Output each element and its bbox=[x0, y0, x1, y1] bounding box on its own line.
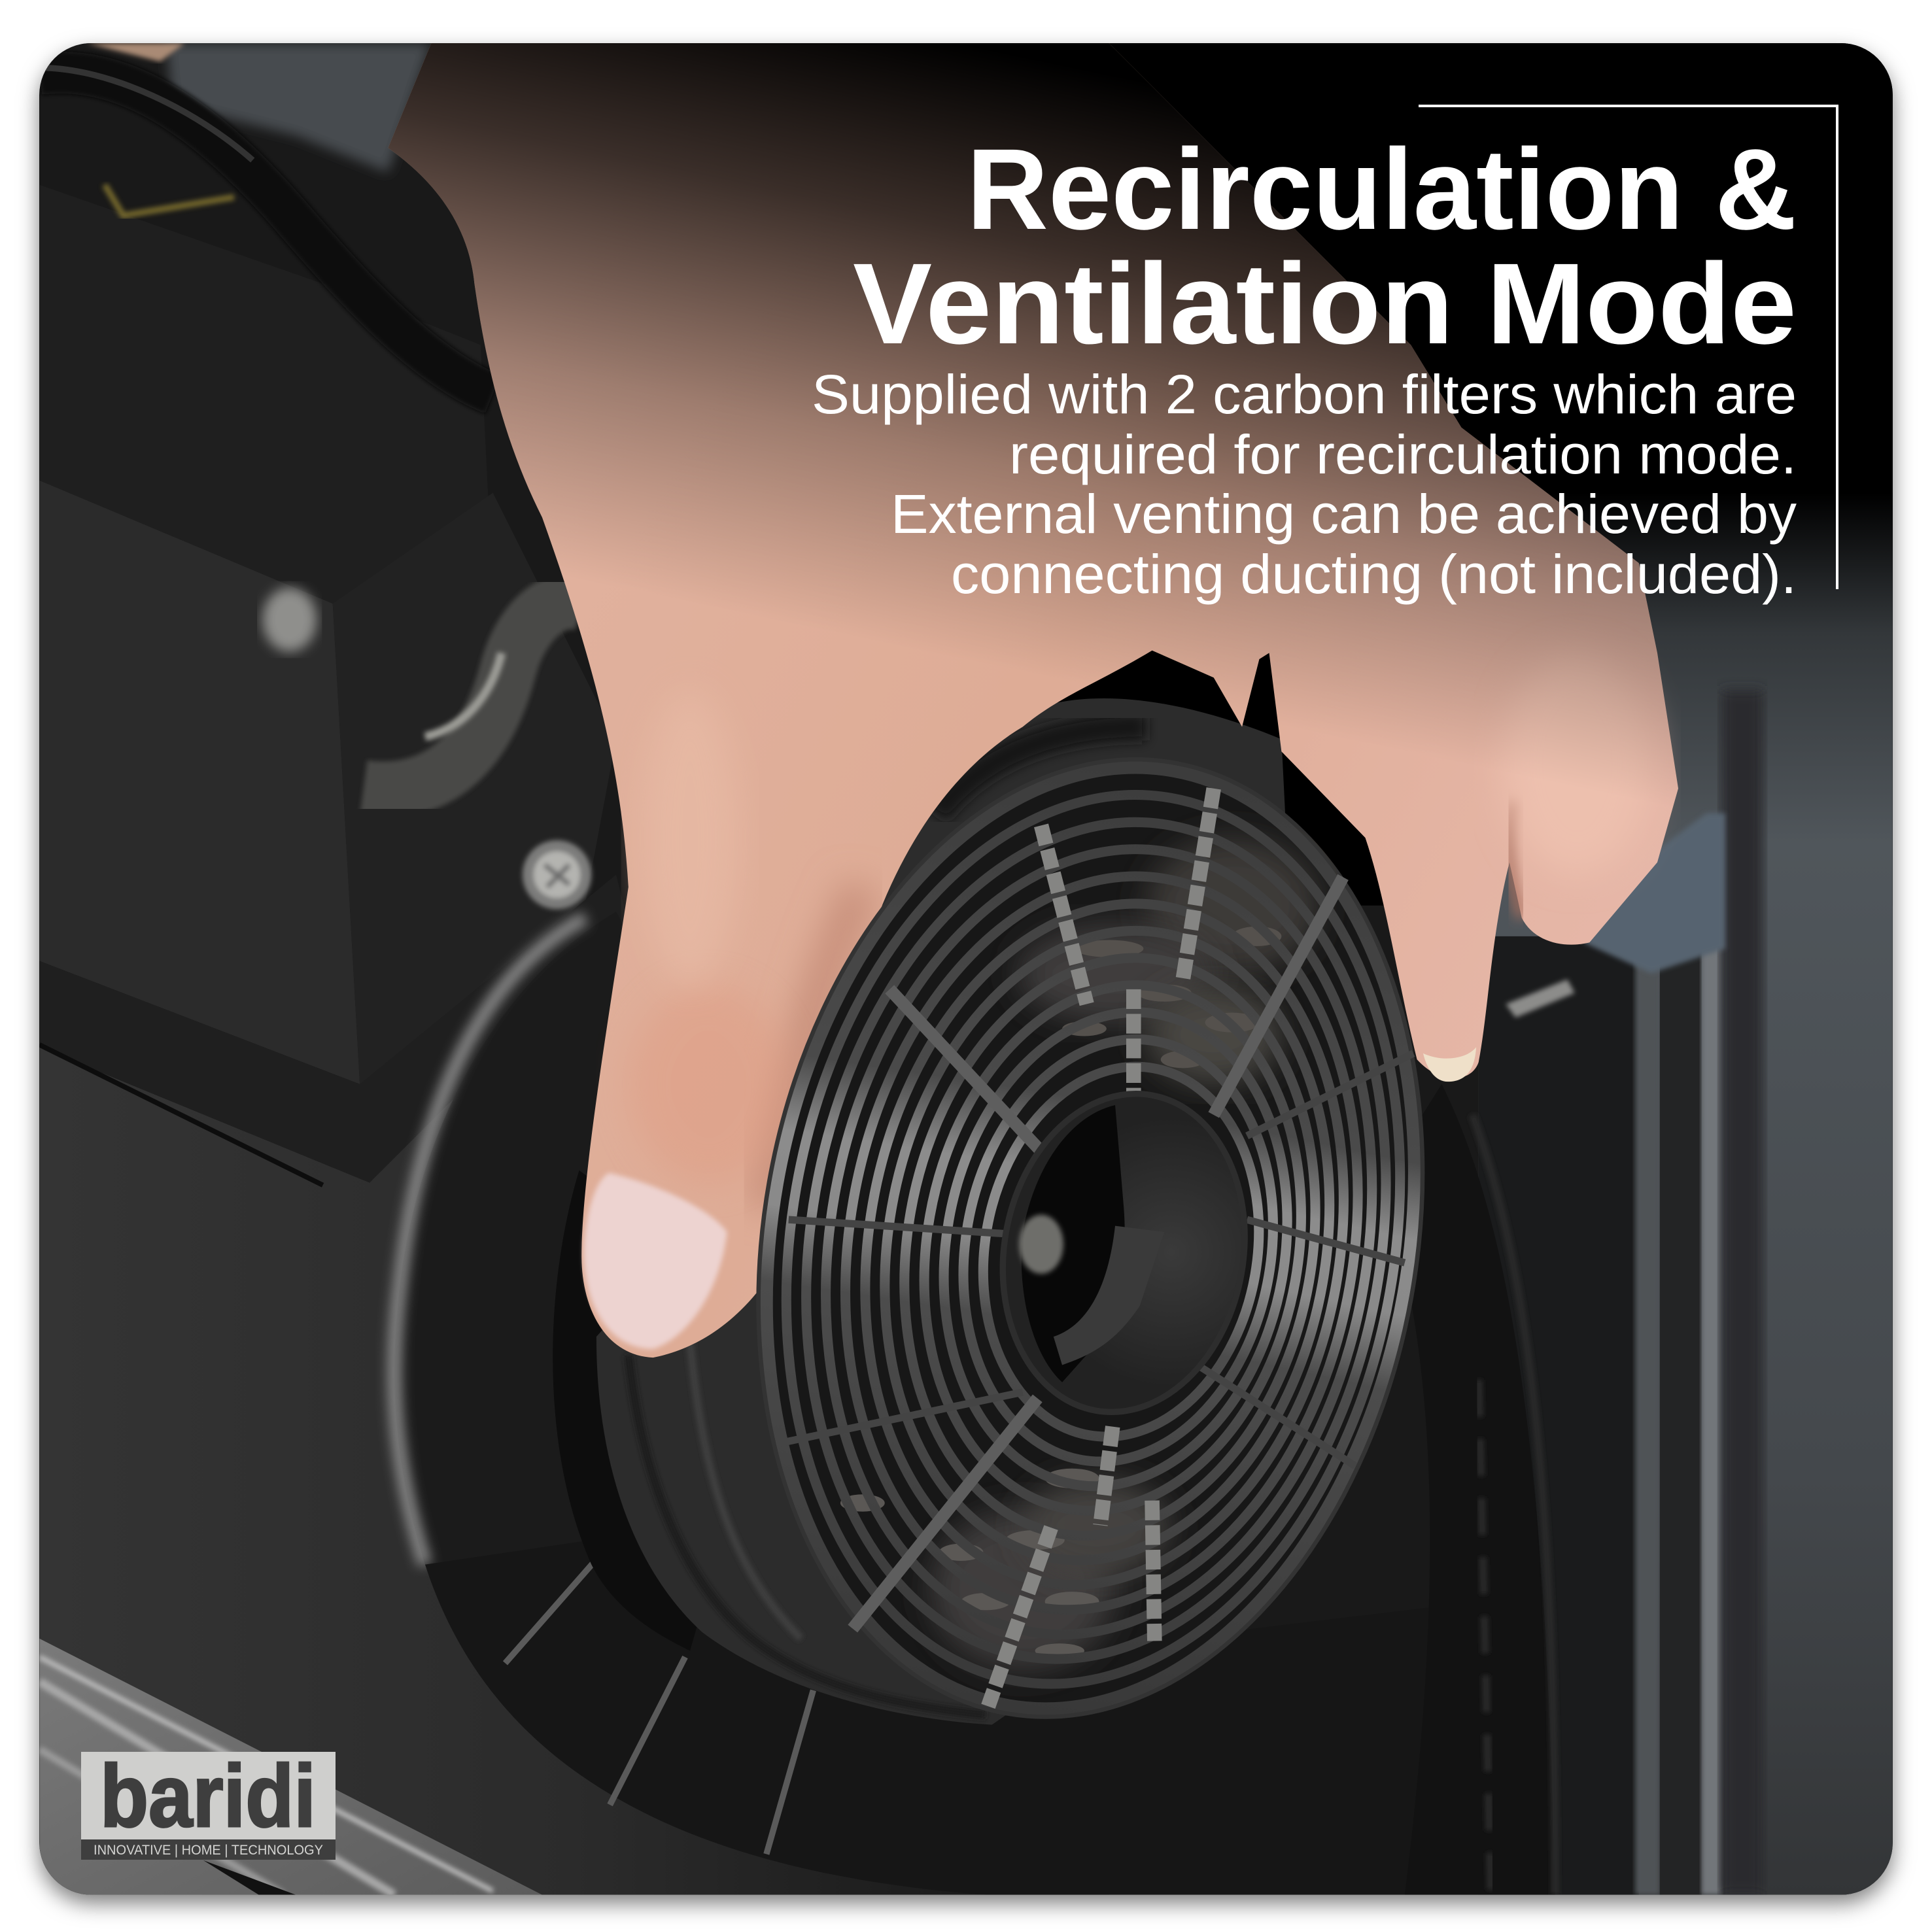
upper left dark block bbox=[39, 185, 493, 604]
round blower shell highlight bbox=[394, 918, 585, 1565]
description text bbox=[812, 364, 1797, 605]
dark top right background bbox=[986, 43, 1893, 906]
description text: External venting can be achieved by bbox=[891, 483, 1797, 545]
title bbox=[853, 126, 1797, 368]
hand bbox=[388, 43, 1678, 1358]
carbon pebbles top bbox=[1016, 838, 1319, 1084]
logo: baridi bbox=[81, 1747, 336, 1860]
dark area inside shell bbox=[394, 912, 863, 1725]
dark blower outlet bbox=[425, 1540, 1479, 1895]
black hose bbox=[1380, 1084, 1555, 1895]
right side steel cabinet bbox=[1479, 493, 1893, 1895]
description text: connecting ducting (not included). bbox=[951, 543, 1797, 605]
thumbnail bbox=[584, 1173, 727, 1349]
filter side body bbox=[596, 698, 1294, 1725]
carbon filter disc bbox=[688, 709, 1493, 1768]
black inlet crescent bbox=[553, 1171, 739, 1651]
concentric grille rings bbox=[695, 716, 1486, 1760]
central hub bbox=[978, 1074, 1269, 1431]
grille spokes bbox=[776, 789, 1413, 1706]
title: Recirculation & bbox=[967, 126, 1797, 254]
filter face base bbox=[688, 709, 1493, 1768]
title: Ventilation Mode bbox=[853, 240, 1797, 368]
carbon pebbles bottom bbox=[840, 1469, 1171, 1669]
chrome screw bbox=[523, 840, 591, 909]
description text: Supplied with 2 carbon filters which are bbox=[812, 364, 1797, 425]
lower left housing bbox=[39, 912, 1109, 1895]
fingernail bbox=[1423, 1047, 1476, 1082]
curved silver pipe bbox=[364, 601, 585, 790]
logo wordmark: baridi bbox=[100, 1747, 316, 1845]
grey tube and wires bbox=[39, 43, 493, 394]
description text: required for recirculation mode. bbox=[1009, 424, 1797, 485]
top black vignette over hand bbox=[39, 43, 1893, 906]
blower fins bbox=[505, 1386, 813, 1854]
logo tagline: INNOVATIVE | HOME | TECHNOLOGY bbox=[94, 1843, 323, 1858]
block bolt bbox=[262, 588, 317, 652]
middle left block bbox=[39, 481, 360, 1084]
bottom left steel plate bbox=[39, 1639, 542, 1895]
heading frame bracket bbox=[1419, 106, 1837, 589]
